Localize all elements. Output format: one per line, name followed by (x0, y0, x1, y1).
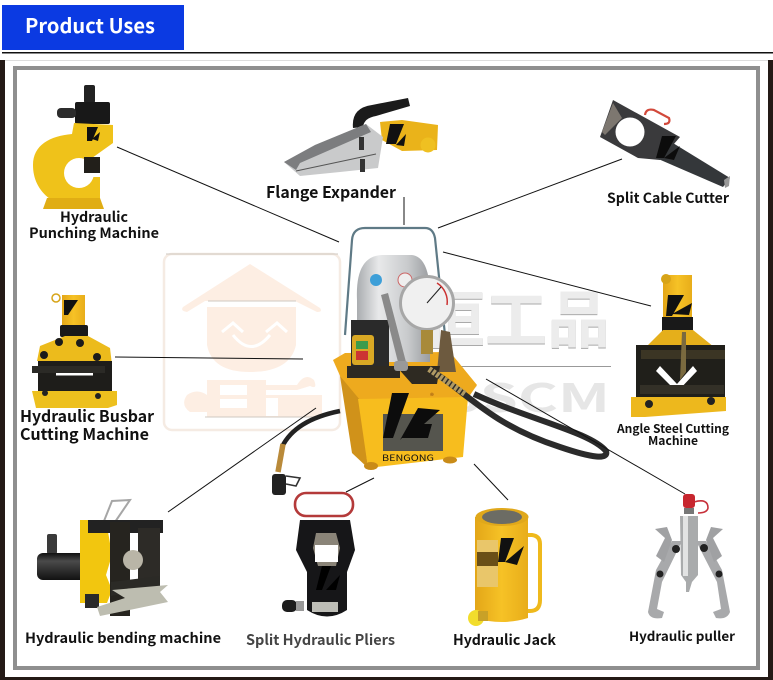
product: split hydraulic pliers: Split Hydraulic Pliers (246, 629, 395, 650)
product: flange expander (266, 98, 438, 203)
header: Product Uses: Product Uses (25, 10, 155, 39)
product: hydraulic bending machine (25, 500, 221, 648)
product: hydraulic puller (629, 494, 735, 645)
line to hydraulic puller (486, 379, 685, 494)
product: hydraulic busbar cutting machine (20, 294, 154, 445)
product: flange expander: Flange Expander (266, 179, 396, 203)
header: Product Uses (2, 5, 773, 61)
product: angle steel cutting machine: Angle Steel Cutting (616, 420, 729, 437)
product: split hydraulic pliers (246, 493, 395, 650)
watermark: house logo (164, 254, 340, 430)
product: hydraulic punching machine: Punching Machine (29, 223, 159, 243)
product: angle steel cutting machine (616, 274, 729, 449)
product: split cable cutter: Split Cable Cutter (607, 188, 730, 208)
product: hydraulic jack (453, 508, 556, 650)
watermark: brand text: 恒恒工品 (360, 270, 610, 360)
product: split cable cutter (600, 100, 730, 208)
product: hydraulic busbar cutting machine: Hydraulic Busbar (20, 403, 154, 427)
hydraulic pump: ® (430, 391, 434, 402)
product: hydraulic punching machine: Hydraulic (60, 207, 128, 227)
connector lines (115, 147, 651, 512)
product: hydraulic busbar cutting machine: Cutting Machine (20, 421, 149, 445)
product: hydraulic punching machine (29, 85, 159, 243)
hydraulic pump (272, 228, 606, 495)
product: hydraulic puller: Hydraulic puller (629, 626, 735, 645)
product: angle steel cutting machine: Machine (648, 432, 698, 449)
product: hydraulic bending machine: Hydraulic bending machine (25, 628, 221, 648)
product: hydraulic jack: Hydraulic Jack (453, 629, 556, 650)
watermark: brand text (360, 270, 611, 424)
hydraulic pump: BENGONG (382, 452, 434, 464)
watermark: brand text: PPSSCM (362, 368, 610, 424)
